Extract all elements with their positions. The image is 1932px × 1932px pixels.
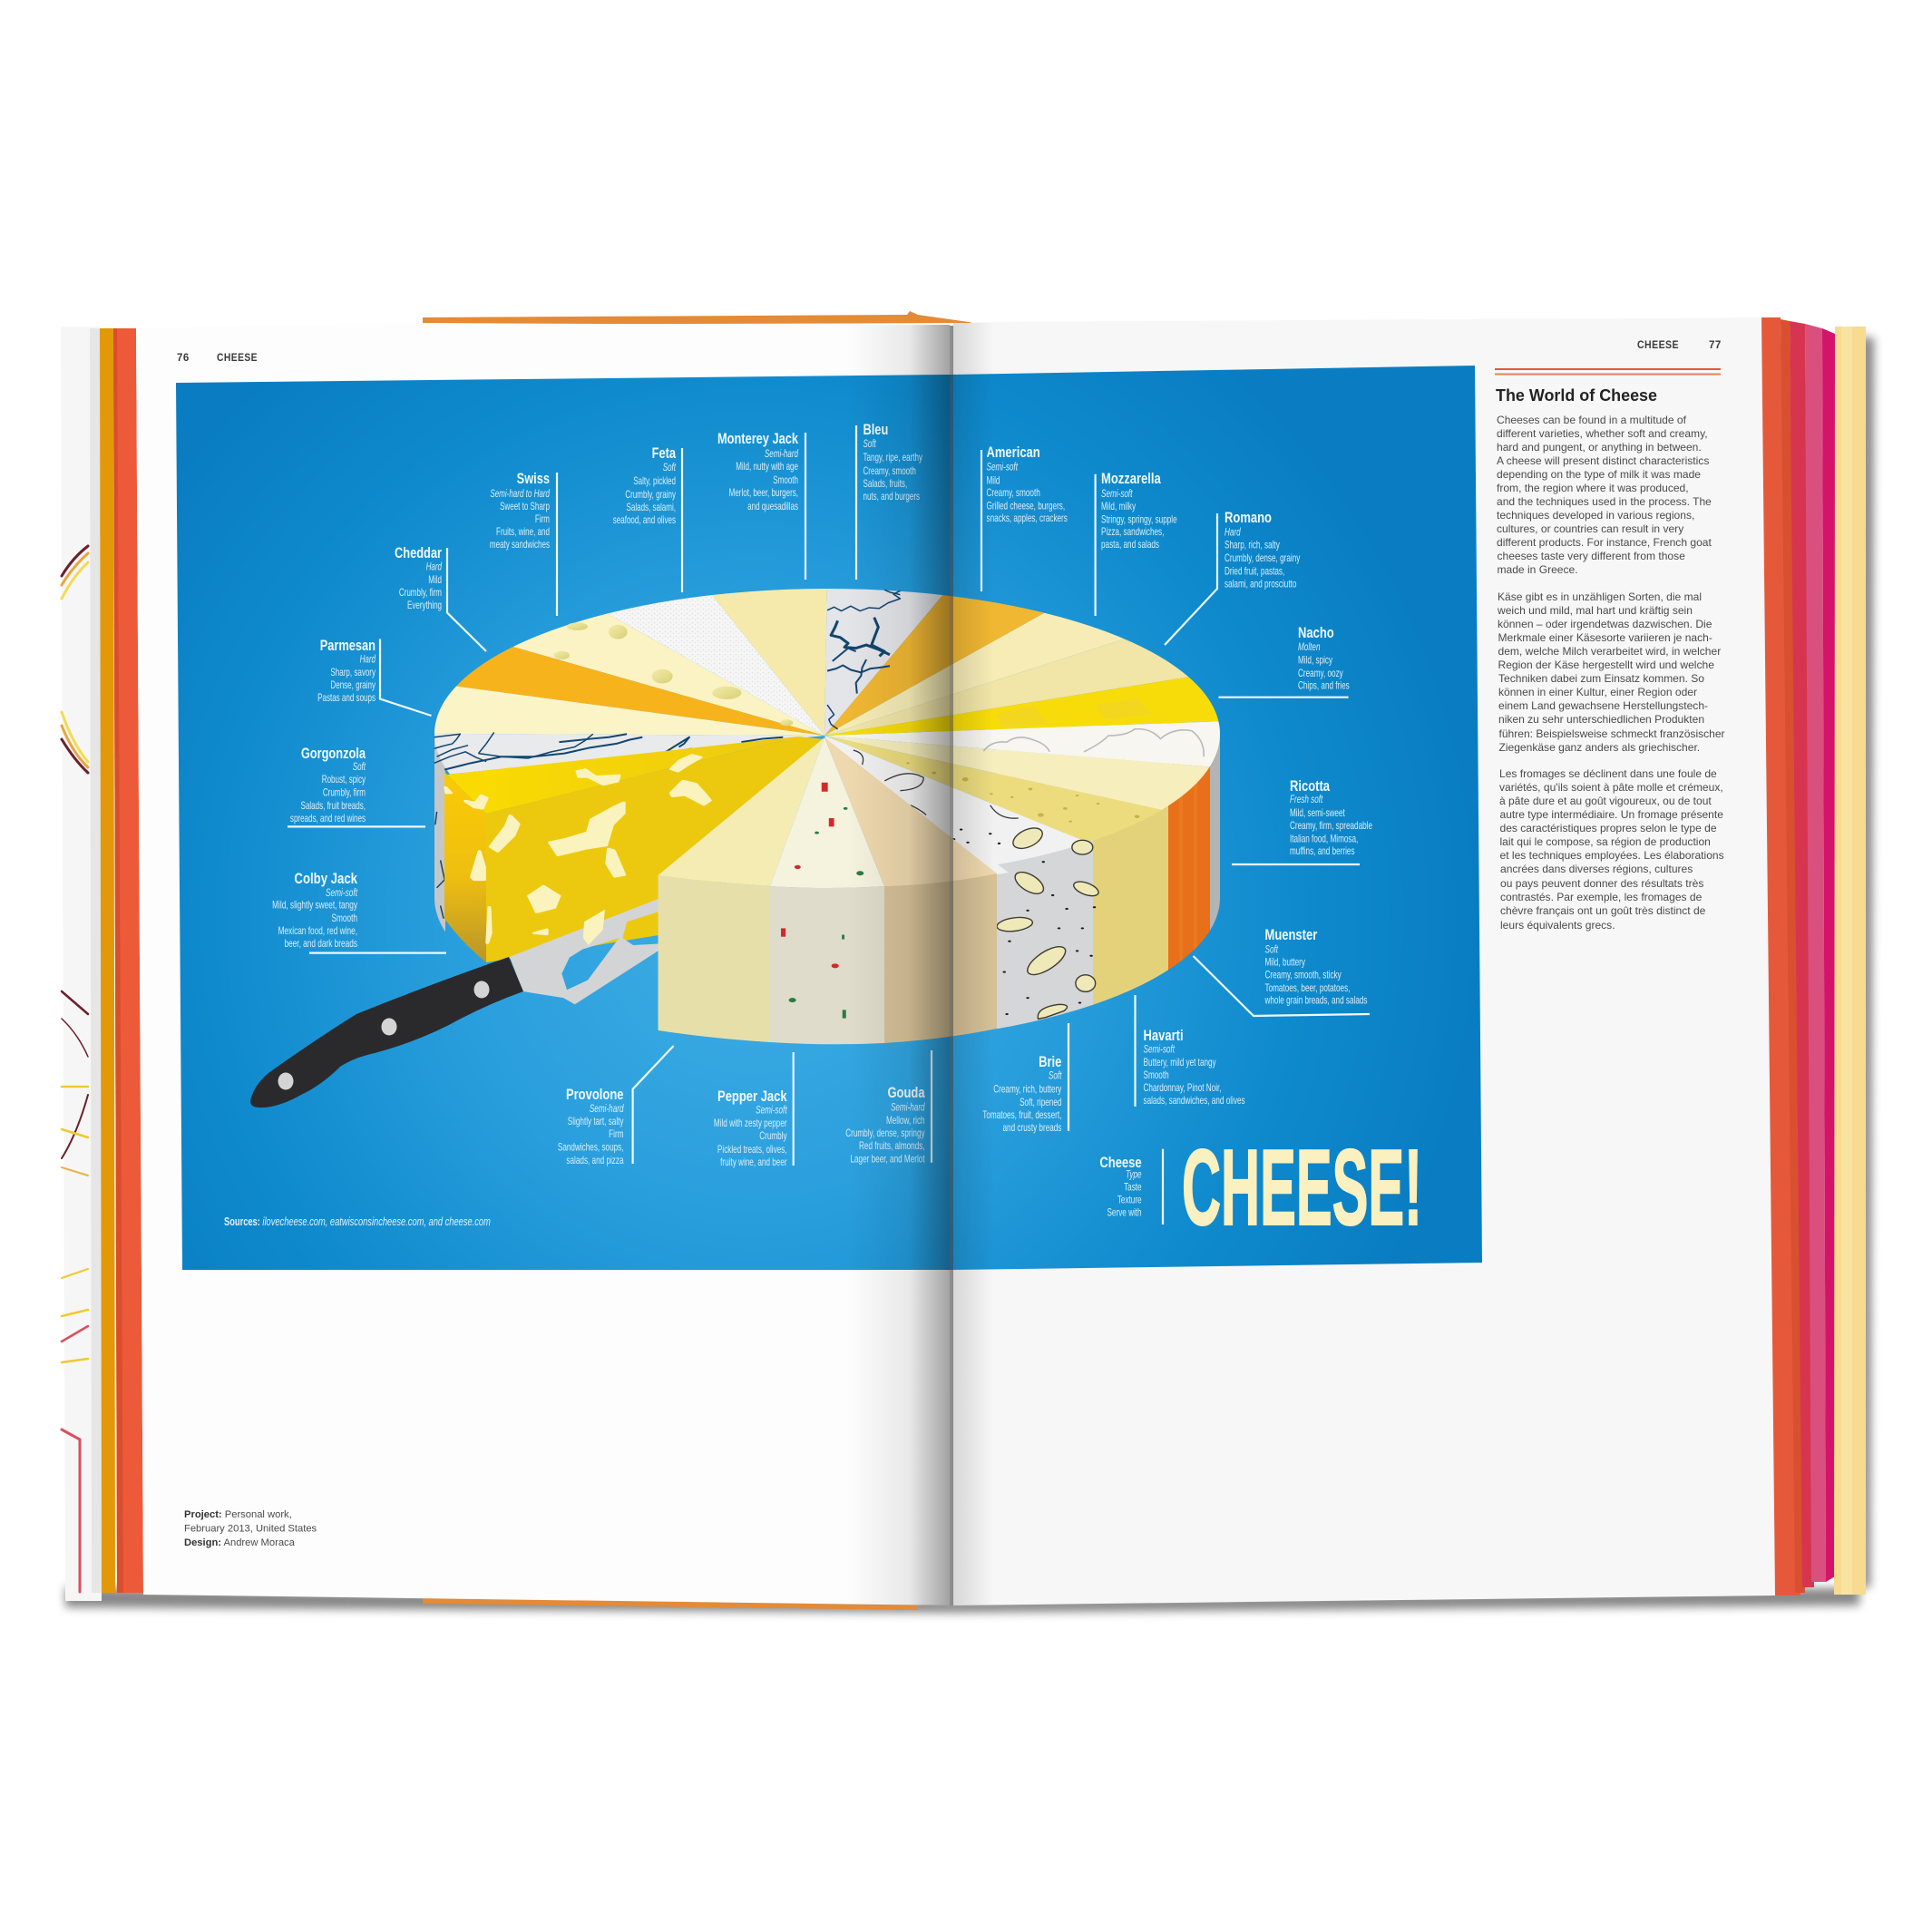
label: Cheddar: Hard [426,561,442,573]
label: Gouda: Lager beer, and Merlot [850,1154,925,1166]
article heading: The World of Cheese [1496,385,1657,405]
label: Swiss: Sweet to Sharp [500,502,550,512]
english text: hard and pungent, or anything in between. [1497,441,1702,454]
label: Swiss: Semi-hard to Hard [490,489,550,500]
label: American: Creamy, smooth [987,488,1040,499]
label: Gorgonzola: Crumbly, firm [323,787,366,799]
label: Brie: Brie [1039,1055,1061,1070]
label: Muenster: Muenster [1264,928,1317,943]
french text: à pâte dure et au goût vigoureux, ou de tout [1499,795,1712,807]
project credits: February 2013, United States [184,1524,317,1535]
wedge top: gouda [825,737,997,886]
swiss holes [554,622,793,726]
colby top surface [447,737,798,814]
label: American: Semi-soft [987,462,1019,473]
wheel side bands [434,726,1220,1029]
right page colour edges [1761,317,1866,1595]
label: Romano: Romano [1225,511,1272,526]
english text: different products. For instance, French goat [1497,536,1712,549]
wedge top: provolone [659,737,825,886]
english text: made in Greece. [1497,563,1578,576]
slice: Monterey Jack [712,589,827,736]
left page [136,323,951,1605]
label: Cheddar: Everything [407,600,442,611]
label: Nacho: Nacho [1298,626,1334,641]
label: Brie: Soft [1049,1070,1062,1082]
slice: Nacho [825,677,1219,736]
label: Havarti: Semi-soft [1143,1044,1176,1056]
label: Pepper Jack: Semi-soft [756,1105,788,1117]
label: Romano: Sharp, rich, salty [1225,540,1280,551]
label: Provolone: Semi-hard [590,1104,624,1115]
label: Nacho: Creamy, oozy [1298,668,1343,679]
wedge top: pepper jack [770,737,884,888]
french text [1499,767,1724,932]
slice: Bleu [825,589,943,736]
label: Mozzarella: Semi-soft [1101,489,1133,500]
label: Romano: Dried fruit, pastas, [1225,566,1284,578]
legend: how to read: Serve with [1107,1207,1142,1219]
label: Brie: Soft, ripened [1020,1098,1061,1108]
english text [1497,414,1712,576]
french text: ou pays peuvent donner des résultats très [1500,877,1703,890]
slice: Cheddar [456,647,825,736]
label: Cheddar: Crumbly, firm [399,588,442,599]
label: Nacho: Molten [1298,642,1321,653]
red double rule [1495,369,1721,374]
knife blade [510,899,659,1004]
book shadow [65,337,1874,1613]
label: Mozzarella: Pizza, sandwiches, [1101,527,1164,538]
german text: Techniken dabei zum Einsatz kommen. So [1498,672,1704,685]
german text: weich und mild, mal hart und kräftig sein [1497,604,1693,617]
label: Colby Jack [272,871,446,953]
label: American: Mild [987,475,1000,487]
right page [951,317,1775,1605]
label: Gouda: Semi-hard [891,1102,925,1114]
french text: leurs équivalents grecs. [1500,919,1615,932]
french text: des caractéristiques propres selon le type de [1500,822,1717,834]
label: Romano [1165,511,1300,645]
slice: Feta [608,595,825,736]
label: Muenster: Mild, buttery [1264,957,1305,969]
german text: Merkmale einer Käsesorte variieren je nach- [1498,631,1712,644]
english text: depending on the type of milk it was made [1497,468,1701,481]
slice: Havarti [825,736,1161,842]
label: Colby Jack: Semi-soft [326,888,358,899]
project credits [184,1509,317,1548]
label: Gorgonzola: Soft [353,762,366,773]
surface details in zoom coordinates [434,590,1204,1019]
wedge side: gouda [884,873,997,1043]
pepper specks [781,783,864,1019]
label: Ricotta: Italian food, Mimosa, [1290,834,1358,845]
legend: how to read: Type [1126,1169,1142,1181]
label: Bleu: nuts, and burgers [864,492,920,503]
label: Pepper Jack [714,1052,794,1168]
label: Provolone: Firm [609,1129,624,1140]
label: American: Grilled cheese, burgers, [987,501,1065,512]
label: Brie: Tomatoes, fruit, dessert, [982,1110,1061,1121]
french text: et les techniques employées. Les élaborations [1500,849,1724,862]
top orange cover strip [423,311,975,325]
english text: cheeses taste very different from those [1497,550,1685,562]
label: Mozzarella: Mozzarella [1101,472,1161,487]
label: Provolone: Provolone [566,1088,624,1103]
label: Havarti: Chardonnay, Pinot Noir, [1143,1083,1222,1094]
label: Feta: Salads, salami, [627,503,676,513]
right page header: 77 [1709,340,1722,351]
french text: variétés, qu'ils soient à pâte molle et crémeux, [1499,781,1723,794]
label: American: snacks, apples, crackers [987,513,1068,524]
label: American [981,445,1068,591]
label: Bleu [856,423,922,580]
label: American: American [987,445,1040,461]
english text: and the techniques used in the process. The [1497,495,1712,508]
slice: Muenster [825,736,1210,810]
wedge side: provolone [659,875,770,1042]
label: Feta: Crumbly, grainy [625,490,676,501]
label: Bleu: Tangy, ripe, earthy [864,453,922,463]
label: Pepper Jack: Pepper Jack [717,1089,787,1105]
label: Havarti: Smooth [1143,1070,1169,1081]
label: Swiss: Swiss [517,472,550,487]
label: Muenster: whole grain breads, and salads [1264,995,1367,1007]
right page header [1637,340,1722,351]
label: Bleu: Soft [864,439,877,450]
slice: Brie [825,736,1081,864]
label: Muenster: Tomatoes, beer, potatoes, [1264,983,1350,994]
bottom orange cover strip [423,1597,918,1610]
cheese wheel illustration [250,589,1220,1108]
left page header: CHEESE [217,353,258,364]
label: Ricotta: muffins, and berries [1290,846,1355,857]
label: Swiss: Fruits, wine, and [496,527,550,538]
label: Gouda: Mellow, rich [886,1116,925,1127]
english text: from, the region where it was produced, [1497,482,1689,494]
slice: American [825,595,1045,736]
german text: können – oder irgendetwas dazwischen. Die [1498,618,1712,630]
label: Brie [982,1023,1068,1134]
label: Swiss: meaty sandwiches [490,540,550,551]
label: Mozzarella: pasta, and salads [1101,540,1159,551]
label: Monterey Jack: and quesadillas [747,502,798,512]
label: Ricotta: Mild, semi-sweet [1290,808,1345,819]
label: Havarti: salads, sandwiches, and olives [1143,1096,1245,1107]
colby patch over blade [583,910,605,945]
label: Ricotta: Fresh soft [1290,795,1323,805]
german text: einem Land gewachsene Herstellungstech- [1498,699,1708,712]
slice: Gorgonzola [434,733,824,775]
label: Monterey Jack: Semi-hard [765,449,798,460]
project credits: Project: Personal work, [184,1509,292,1520]
label: Ricotta [1232,779,1372,864]
label: Gorgonzola: spreads, and red wines [290,814,366,825]
label: Ricotta: Creamy, firm, spreadable [1290,821,1372,832]
label: Provolone: salads, and pizza [566,1156,624,1166]
label: Parmesan: Sharp, savory [330,668,376,678]
knife rivets [278,981,490,1090]
label: Havarti [1136,995,1245,1107]
label: Gorgonzola: Salads, fruit breads, [301,801,366,812]
label: Feta [613,446,682,592]
label: Bleu: Salads, fruits, [864,479,907,490]
label: Romano: Hard [1225,527,1241,539]
label: Parmesan [317,639,432,716]
label: Mozzarella: Stringy, springy, supple [1101,514,1177,526]
label: Feta: Salty, pickled [633,476,676,487]
label: Swiss [490,472,557,616]
label: Monterey Jack: Monterey Jack [717,432,799,447]
german text: können in einer Kultur, einer Region oder [1498,686,1697,698]
label: Gouda [845,1050,932,1166]
label: Colby Jack: Mild, slightly sweet, tangy [272,900,357,912]
label: Bleu: Creamy, smooth [864,466,916,477]
french text: contrastés. Par exemple, les fromages de [1500,891,1703,903]
label: Cheddar: Mild [428,575,442,586]
legend: how to read: Texture [1117,1195,1142,1206]
label: Muenster [1194,928,1370,1016]
wheel top slices [434,589,1220,864]
label: Gorgonzola: Gorgonzola [301,746,366,762]
label: Gorgonzola: Robust, spicy [322,775,366,785]
label: Colby Jack: Colby Jack [294,871,358,887]
french text: ancrées dans diverses régions, cultures [1500,863,1693,875]
colby jack cut faces [444,737,825,962]
french text: autre type intermédiaire. Un fromage présente [1500,808,1723,821]
label: Feta: Soft [663,463,677,473]
label: Monterey Jack: Merlot, beer, burgers, [729,488,798,499]
label: Romano: salami, and prosciutto [1225,579,1297,590]
nacho patches [997,698,1153,727]
german text: dem, welche Milch verarbeitet wird, in welcher [1498,645,1721,658]
label: Havarti: Havarti [1143,1029,1184,1044]
german text: Käse gibt es in unzähligen Sorten, die mal [1498,590,1702,603]
german text: Region der Käse hergestellt wird und welche [1498,659,1714,671]
label: Feta: seafood, and olives [613,515,676,526]
knife [250,899,659,1107]
label: Romano: Crumbly, dense, grainy [1225,553,1300,564]
label: Pepper Jack: Pickled treats, olives, [717,1145,787,1156]
front cut face [486,737,825,962]
slice: Mozzarella [825,613,1125,736]
book gutter shading [848,323,994,1605]
label: Havarti: Buttery, mild yet tangy [1143,1058,1216,1068]
label: Muenster: Creamy, smooth, sticky [1264,970,1342,981]
bleu veins [827,590,900,729]
legend: how to read: Taste [1124,1182,1142,1194]
brie filler under wedge [825,736,1009,893]
label: Swiss: Firm [535,514,550,525]
havarti pits [906,762,1139,823]
label: Feta: Feta [652,446,677,462]
knife handle [250,957,523,1107]
label: Monterey Jack: Smooth [773,475,798,486]
sources line: Sources: ilovecheese.com, eatwisconsincheese.com, and cheese.com [224,1216,491,1228]
label: Pepper Jack: Mild with zesty pepper [714,1118,787,1129]
legend: how to read [1099,1149,1163,1225]
label: Monterey Jack [717,432,805,580]
german text: führen: Beispielsweise schmeckt französischer [1498,727,1725,740]
project credits: Design: Andrew Moraca [184,1537,296,1548]
label: Cheddar: Cheddar [395,546,442,561]
english text: techniques developed in various regions, [1497,509,1694,522]
label: Colby Jack: beer, and dark breads [284,939,357,950]
label: Parmesan: Hard [360,654,376,666]
gorgonzola veins [434,732,783,919]
slice: Swiss [513,613,825,736]
label: Gorgonzola [288,746,425,826]
label: Muenster: Soft [1264,944,1279,956]
label: Parmesan: Pastas and soups [317,693,376,704]
slice: Ricotta [825,721,1220,767]
label: Provolone: Slightly tart, salty [568,1117,624,1127]
label: Gouda: Crumbly, dense, springy [845,1128,925,1139]
pulled-out wedge [659,737,997,1044]
left page header [177,353,258,364]
french text: lait qui le compose, sa région de production [1500,835,1711,848]
left cover and page edges [61,327,143,1601]
left cut side [444,772,486,962]
label: Monterey Jack: Mild, nutty with age [736,462,798,473]
german text [1497,590,1725,754]
label: Colby Jack: Smooth [331,913,357,924]
label: Provolone [558,1046,674,1166]
label: Nacho: Chips, and fries [1298,680,1350,692]
colby marbling [445,755,710,942]
label: Pepper Jack: fruity wine, and beer [720,1157,787,1168]
right page header: CHEESE [1637,340,1679,351]
ricotta clouds [983,729,1204,756]
label: Ricotta: Ricotta [1290,779,1331,795]
label: Mozzarella [1096,472,1177,616]
cover artwork arcs [62,546,88,1592]
slice: Romano [825,639,1188,736]
blue infographic panel [176,366,1482,1270]
label: Mozzarella: Mild, milky [1101,502,1136,512]
label: Parmesan: Dense, grainy [330,680,376,691]
french text: Les fromages se déclinent dans une foule de [1499,767,1717,780]
english text: A cheese will present distinct characteristics [1497,454,1709,467]
english text: Cheeses can be found in a multitude of [1497,414,1687,426]
label: Brie: and crusty breads [1003,1123,1061,1134]
label: Nacho: Mild, spicy [1298,655,1332,667]
label: Colby Jack: Mexican food, red wine, [278,926,357,937]
german text: Ziegenkäse ganz anders als griechischer. [1498,741,1700,754]
german text: niken zu sehr unterschiedlichen Produkten [1498,713,1704,726]
french text: chèvre français ont un goût très distinct de [1500,904,1706,917]
slice: Parmesan [434,686,824,736]
legend: how to read: Cheese [1099,1156,1142,1171]
label: Gouda: Gouda [887,1086,925,1101]
english text: cultures, or countries can result in very [1497,522,1683,535]
label: Nacho [1219,626,1350,698]
main title CHEESE!: CHEESE! [1182,1127,1422,1248]
label: Brie: Creamy, rich, buttery [993,1084,1061,1096]
left page header: 76 [177,353,190,364]
wedge side: pepper jack [770,886,884,1044]
label: Provolone: Sandwiches, soups, [558,1142,624,1154]
label: Bleu: Bleu [864,423,888,438]
brie ovals and dots [994,825,1103,1019]
english text: different varieties, whether soft and creamy, [1497,427,1708,440]
label: Parmesan: Parmesan [320,639,376,654]
label: Cheddar [395,546,486,651]
label: Gouda: Red fruits, almonds, [859,1141,925,1152]
label: Pepper Jack: Crumbly [759,1131,787,1142]
